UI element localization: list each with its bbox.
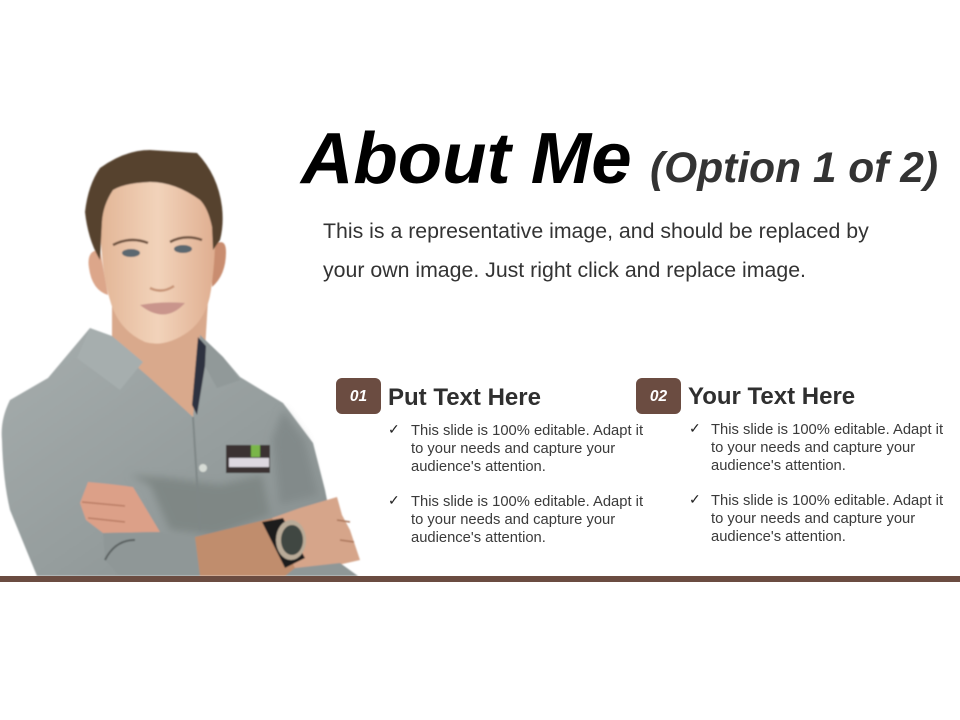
- title: About Me: [301, 118, 632, 199]
- text 2b: [711, 493, 943, 545]
- sleeve cuff: [103, 532, 200, 576]
- text 2b: This slide is 100% editable. Adapt it: [711, 493, 943, 509]
- text 1b: This slide is 100% editable. Adapt it: [411, 494, 643, 510]
- collar: [77, 328, 143, 390]
- neck: [112, 300, 208, 417]
- name badge: [226, 445, 270, 473]
- check 1b: ✓: [388, 492, 400, 508]
- heading 1: Put Text Here: [388, 384, 541, 411]
- left hand: [80, 482, 160, 533]
- forearm: [195, 517, 300, 576]
- shirt body: [2, 328, 358, 576]
- placket: [193, 417, 200, 530]
- eyes and brows: [113, 237, 202, 257]
- intro text: your own image. Just right click and replace image.: [323, 258, 806, 282]
- text 2a: audience's attention.: [711, 458, 846, 474]
- right hand: [272, 497, 360, 568]
- text 2a: to your needs and capture your: [711, 440, 915, 456]
- intro text: [323, 219, 869, 282]
- hair: [85, 150, 223, 260]
- intro text: This is a representative image, and should be replaced by: [323, 219, 869, 243]
- shirt shadows: [130, 410, 318, 535]
- text 1a: [411, 423, 643, 475]
- check 2a: ✓: [689, 420, 701, 436]
- nose and mouth: [140, 286, 185, 315]
- text 2b: audience's attention.: [711, 529, 846, 545]
- badge 02: [636, 378, 681, 414]
- badge 02: 02: [650, 388, 667, 405]
- photo: man with crossed arms: [0, 148, 360, 576]
- badge 01: [336, 378, 381, 414]
- heading 2: Your Text Here: [688, 383, 855, 410]
- text 2b: to your needs and capture your: [711, 511, 915, 527]
- text 2a: This slide is 100% editable. Adapt it: [711, 422, 943, 438]
- check 2b: ✓: [689, 491, 701, 507]
- text 1a: This slide is 100% editable. Adapt it: [411, 423, 643, 439]
- subtitle: (Option 1 of 2): [650, 145, 938, 192]
- text 1b: to your needs and capture your: [411, 512, 615, 528]
- text 1a: audience's attention.: [411, 459, 546, 475]
- head: [100, 165, 215, 344]
- shirt button: [199, 464, 207, 472]
- text 1b: audience's attention.: [411, 530, 546, 546]
- ears: [88, 250, 108, 295]
- badge 01: 01: [350, 388, 367, 405]
- sleeve under hand: [285, 563, 358, 576]
- bottom rule: [0, 576, 960, 582]
- watch: [262, 518, 306, 568]
- text 1b: [411, 494, 643, 546]
- check 1a: ✓: [388, 421, 400, 437]
- text 1a: to your needs and capture your: [411, 441, 615, 457]
- text 2a: [711, 422, 943, 474]
